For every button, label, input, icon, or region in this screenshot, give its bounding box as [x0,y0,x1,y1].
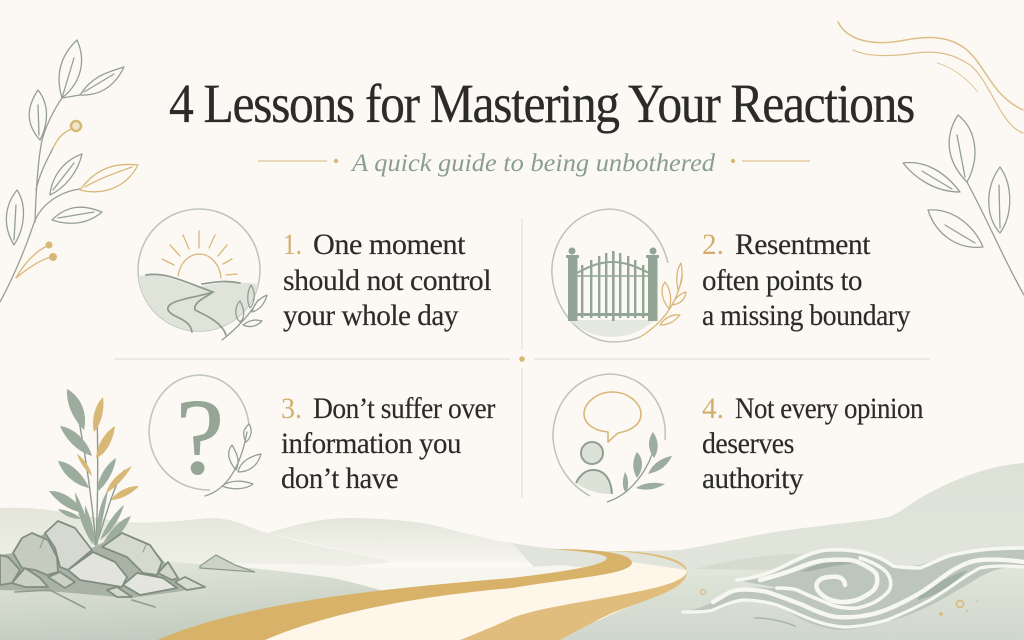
panel: lesson 4 [553,374,923,502]
text: lesson 4: 4. [702,392,724,425]
text: lesson 2: a missing boundary [702,299,910,332]
panel: lesson 2 [552,209,910,345]
text: lesson 2: Resentment [735,228,871,261]
branch: top right [903,115,1024,295]
text: lesson 1: 1. [283,228,302,261]
landscape [0,463,1024,640]
icon: sunrise over winding path [138,209,267,340]
text: lesson 2 [702,228,910,332]
dividers [115,218,930,498]
title: 4 Lessons for Mastering Your Reactions [169,73,914,134]
text: lesson 2: often points to [702,264,862,297]
text: lesson 3 [281,392,495,495]
text: lesson 4: authority [702,462,803,495]
subtitle: A quick guide to being unbothered [350,150,716,177]
text: lesson 1: your whole day [283,299,458,332]
text: lesson 3: 3. [281,392,302,425]
panel: lesson 1 [138,209,491,340]
plant [49,389,139,548]
text: lesson 4 [702,392,923,495]
rocks [0,521,255,608]
icon: question mark [149,375,261,497]
icon: garden gate [552,209,686,345]
text: lesson 3: Don’t suffer over [313,392,495,425]
subtitle [258,150,810,177]
branch: top left [0,40,138,302]
text: lesson 1: should not control [283,264,491,297]
text: lesson 4: Not every opinion [735,392,923,425]
swirling water [683,548,1024,630]
water sparkles [700,590,978,616]
text: lesson 1 [283,228,491,332]
text: lesson 3: don’t have [281,462,398,495]
text: lesson 1: One moment [313,228,466,261]
gold flowing lines [838,22,1023,133]
winding path [157,549,687,640]
center dot [519,356,525,362]
text: lesson 4: deserves [702,427,794,460]
icon: person with speech bubble [553,374,672,502]
panel: lesson 3 [149,375,495,497]
text: lesson 3: information you [281,427,461,460]
icon: question mark: ? [176,378,224,497]
text: lesson 2: 2. [702,228,724,261]
